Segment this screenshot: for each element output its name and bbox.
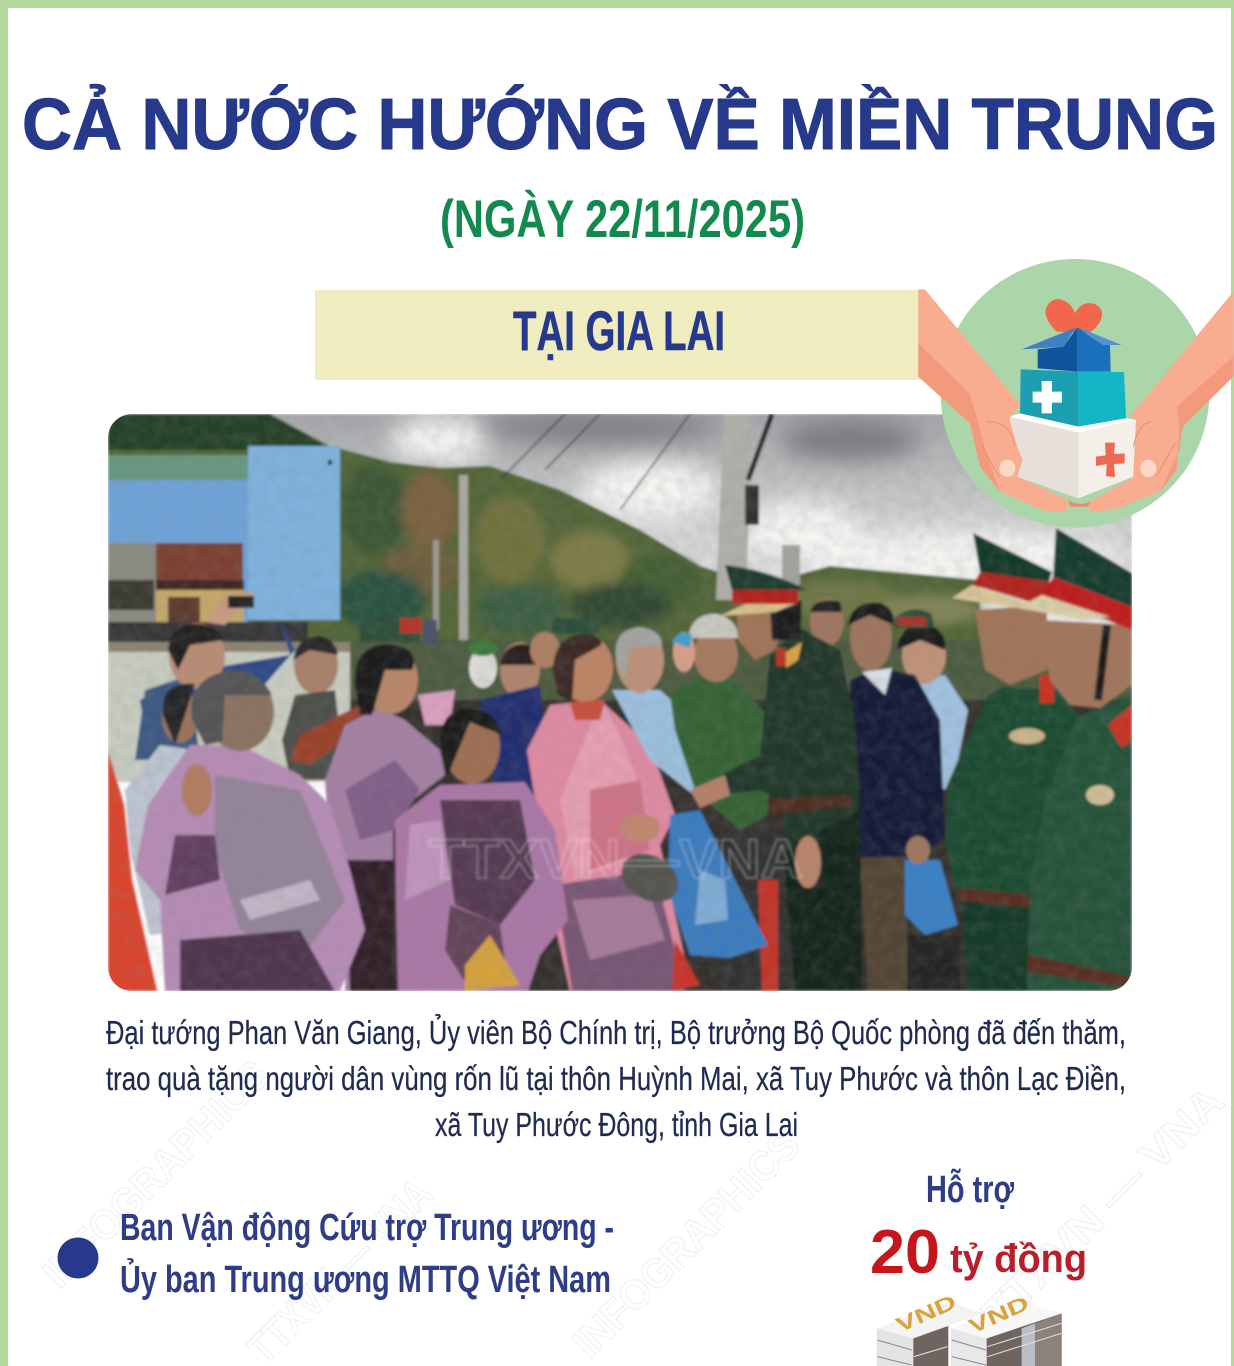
officer two [945, 533, 1085, 991]
general center [690, 565, 862, 991]
watermark [33, 1051, 1233, 1366]
old woman blue raincoat [612, 627, 705, 800]
icon: white box with red cross [1009, 413, 1136, 498]
woman with blue coat rear [895, 609, 968, 790]
caption [106, 1014, 1126, 1143]
support amount [870, 1167, 1087, 1287]
support amount: Hỗ trợ [926, 1167, 1015, 1211]
watermark: TTXVN — VNA [973, 1077, 1233, 1336]
green shirt man [670, 614, 790, 991]
organization name [120, 1207, 614, 1301]
navy jacket man [848, 603, 960, 991]
icon: left hand [918, 289, 1068, 512]
icon: gift heart [1045, 299, 1102, 333]
hillside [108, 418, 982, 644]
crowd behind [135, 592, 600, 790]
banner: Tại Gia Lai: TẠI GIA LAI [513, 299, 725, 362]
sky [271, 414, 1132, 626]
icon: gift boxes held by hands [918, 259, 1233, 528]
photo watermark: TTXVN—VNA [428, 827, 803, 890]
pink raincoat woman [527, 634, 685, 991]
caption: xã Tuy Phước Đông, tỉnh Gia Lai [435, 1106, 798, 1143]
blue building [108, 478, 250, 624]
watermark: INFOGRAPHICS [33, 1051, 278, 1296]
icon: VND money stacks [877, 1290, 1062, 1366]
title: CẢ NƯỚC HƯỚNG VỀ MIỀN TRUNG [22, 84, 1218, 165]
officer three [1017, 528, 1132, 991]
blue poncho [668, 810, 768, 991]
banner: Tại Gia Lai [315, 290, 921, 380]
icon: VND money stacks: VND [965, 1292, 1033, 1339]
center woman: raincoat [395, 708, 568, 991]
old houses [108, 543, 156, 623]
bullet [58, 1238, 98, 1278]
icon: blue box [1022, 327, 1122, 372]
icon: VND money stacks: VND [893, 1290, 960, 1337]
water and embankment [108, 642, 368, 652]
support amount: tỷ đồng [950, 1237, 1087, 1281]
bag and hands [620, 814, 680, 903]
red raincoat [108, 750, 157, 991]
support amount: 20 [870, 1218, 940, 1287]
subtitle: date: (NGÀY 22/11/2025) [440, 189, 805, 249]
woman: grey hair purple raincoat [135, 670, 365, 991]
background man [810, 598, 844, 646]
utility poles [459, 475, 468, 650]
photo: general greeting flood victims [108, 414, 1132, 991]
organization name: Ban Vận động Cứu trợ Trung ương - [120, 1207, 614, 1249]
white shirt person [125, 684, 200, 935]
icon: right hand [1068, 292, 1233, 512]
woman: purple raincoat left-center [325, 644, 455, 991]
organization name: Ủy ban Trung ương MTTQ Việt Nam [120, 1257, 611, 1301]
icon: teal box with cross [1020, 369, 1126, 427]
watermark: INFOGRAPHICS [563, 1121, 808, 1366]
photo grain [108, 414, 1132, 991]
watermark: TTXVN — VNA [238, 1169, 441, 1366]
